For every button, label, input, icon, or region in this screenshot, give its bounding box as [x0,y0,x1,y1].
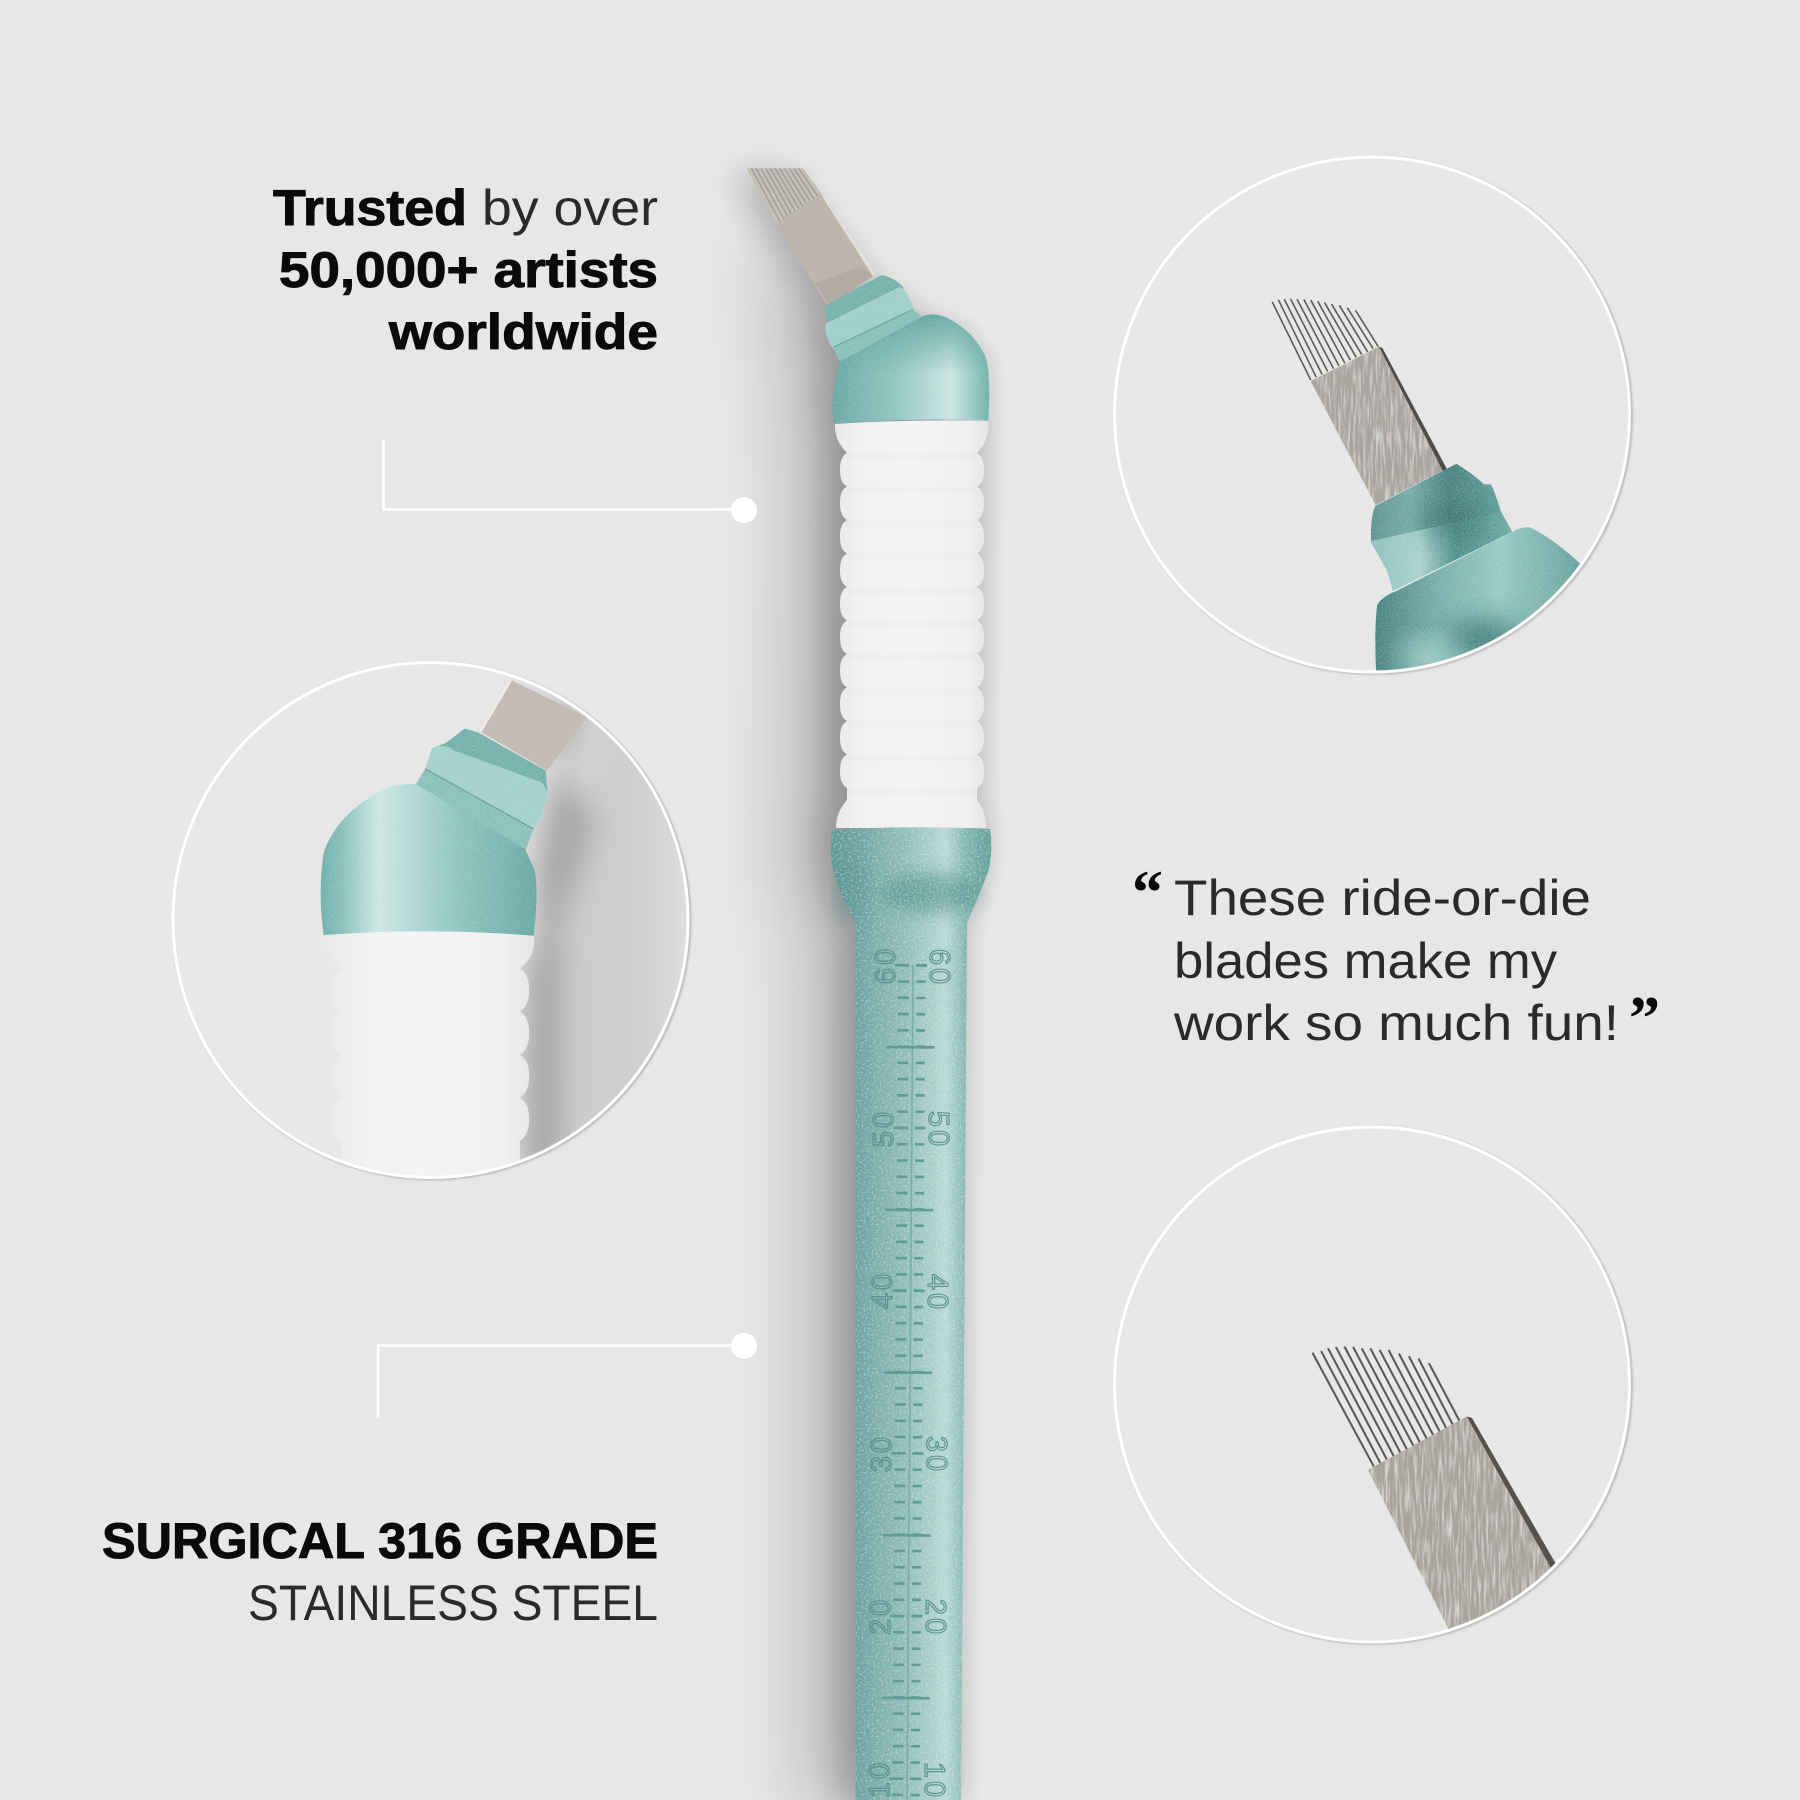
pen ruler numbers [864,946,955,1800]
connector: bottom callout line and dot [378,1333,757,1417]
heading: trusted by artists [273,180,658,360]
pen: main microblading tool [747,168,991,1800]
pen ruler ticks [894,964,924,1800]
pen collar [825,275,923,363]
pen ruler numbers: 10 [918,1762,950,1800]
collar [1370,464,1512,591]
heading: surgical stainless steel: SURGICAL 316 GRADE [102,1513,658,1569]
pen ruler numbers: 20 [919,1599,951,1637]
pen ruler numbers: 60 [923,949,955,987]
blade body [1311,347,1446,505]
heading: trusted by artists: Trusted by over [273,180,658,236]
pen ruler numbers: 30 [920,1436,952,1474]
heading: trusted by artists: 50,000+ artists [279,242,658,298]
grip [323,931,534,1191]
testimonial quote [1132,859,1660,1053]
pen ruler numbers: 10 [864,1760,896,1798]
pen ruler numbers: 40 [921,1274,953,1312]
blade body [1368,1416,1551,1629]
pen ruler numbers: 20 [865,1597,897,1635]
heading: surgical stainless steel [102,1513,658,1631]
testimonial quote: work so much fun! [1173,995,1619,1051]
pen ruler numbers: 30 [866,1434,898,1472]
testimonial quote: These ride-or-die [1174,870,1591,926]
pen blade [747,168,876,305]
head [1375,527,1582,681]
testimonial quote: blades make my [1174,933,1557,989]
head [321,784,537,936]
shadow [520,692,686,1160]
circle: needles close-up bottom right [1114,1127,1632,1689]
heading: surgical stainless steel: STAINLESS STEEL [248,1575,658,1631]
pen ruler numbers: 40 [867,1271,899,1309]
pen head [833,315,989,424]
pen ruler numbers: 60 [870,946,902,984]
circle: grip close-up left [173,662,690,1191]
pen ruler numbers: 50 [868,1109,900,1147]
blade [479,679,587,771]
needles [1312,1347,1460,1466]
pen white grip [835,420,988,828]
connector: top callout line and dot [384,440,757,523]
pen ruler numbers: 50 [922,1111,954,1149]
collar [415,729,547,850]
heading: trusted by artists: worldwide [388,304,658,360]
circle: blade close-up top right [1114,157,1632,681]
opening quotation mark: “ [1132,859,1163,927]
needles [1272,299,1378,380]
closing quotation mark: ” [1629,985,1660,1053]
pen shadow [733,168,998,1800]
pen handle [831,827,991,1800]
